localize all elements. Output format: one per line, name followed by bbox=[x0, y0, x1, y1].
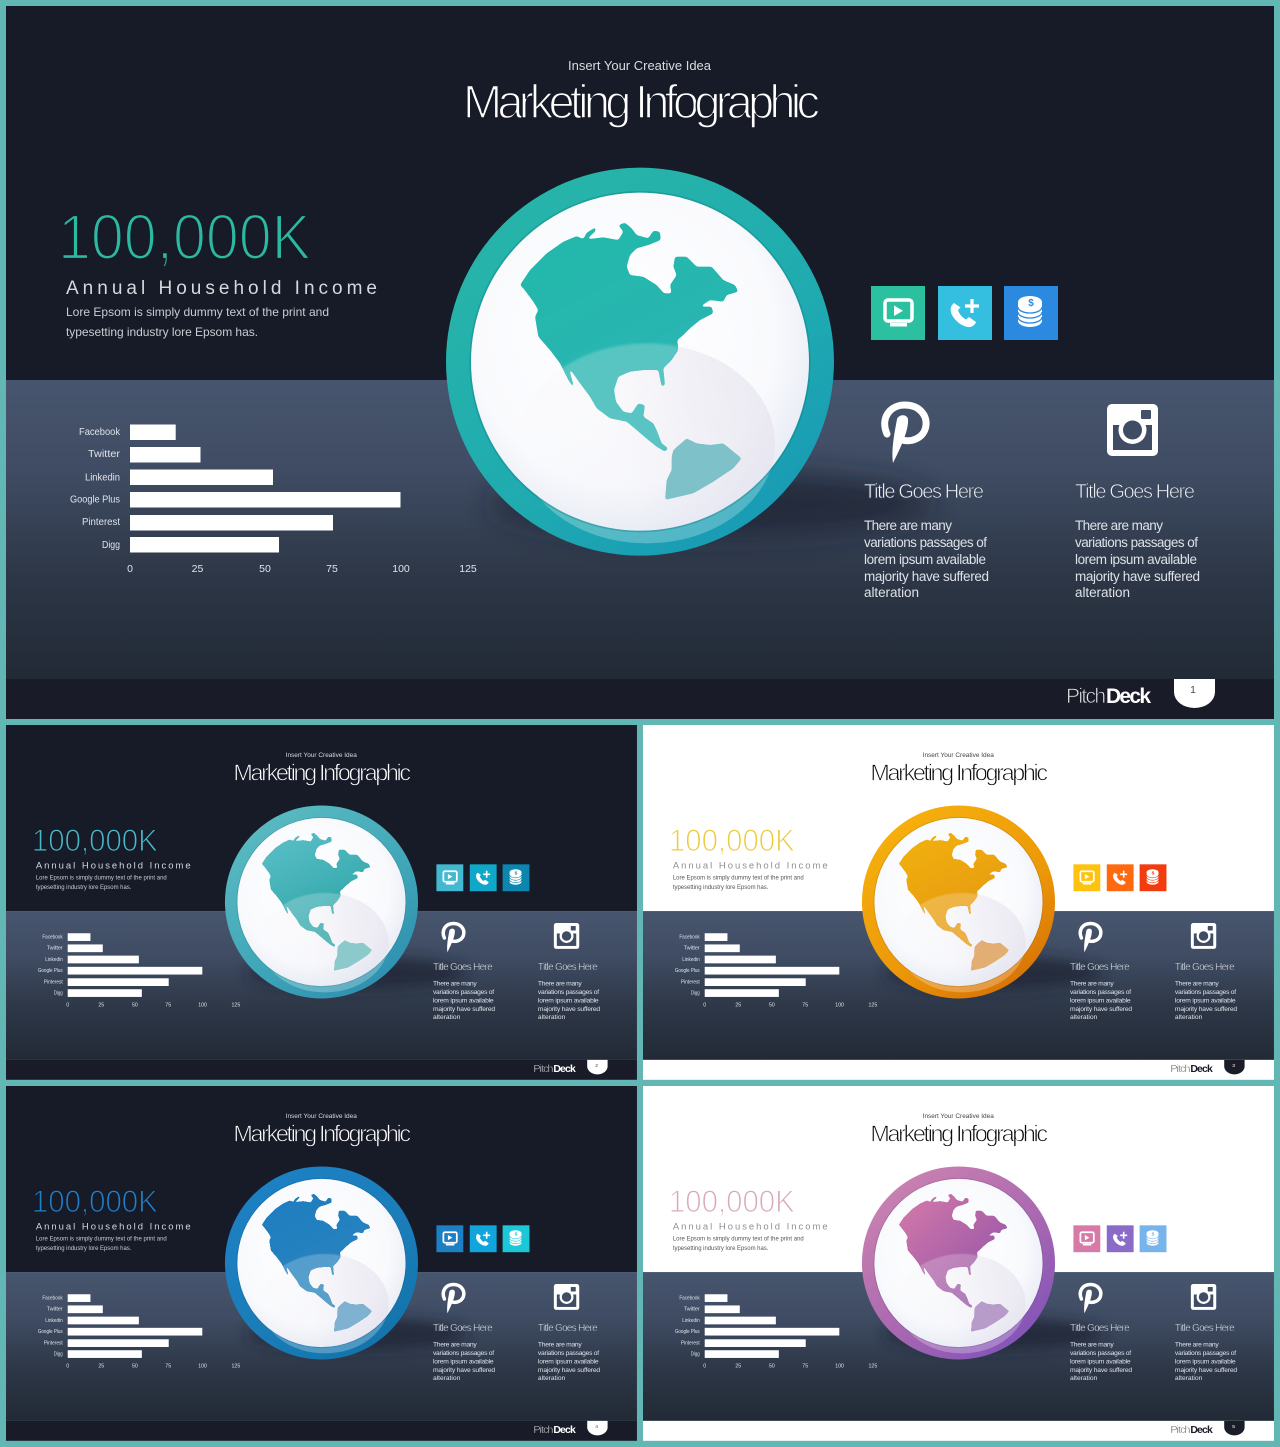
title: Marketing Infographic bbox=[870, 760, 1048, 786]
icon: screen bbox=[1073, 1225, 1100, 1252]
column: pinterest text: Title Goes Here bbox=[864, 481, 984, 503]
bar chart: Facebook bbox=[79, 426, 121, 438]
column: pinterest text: lorem ipsum available bbox=[1070, 998, 1131, 1005]
icon: coins: $ bbox=[1028, 298, 1034, 309]
bar chart: Pinterest bbox=[44, 979, 63, 985]
logo: Pitch bbox=[533, 1064, 554, 1075]
column: pinterest text: variations passages of bbox=[433, 1350, 494, 1357]
title: Marketing Infographic bbox=[233, 760, 411, 786]
column: instagram text: alteration bbox=[538, 1014, 566, 1021]
lower band panel bbox=[6, 380, 1274, 679]
stat heading: Annual Household Income bbox=[673, 860, 828, 871]
stat description: typesetting industry lore Epsom has. bbox=[36, 1246, 132, 1252]
column: pinterest text: majority have suffered bbox=[864, 569, 989, 584]
icon: instagram bbox=[1191, 923, 1216, 949]
slide 5: purple light bbox=[643, 1086, 1274, 1441]
column: pinterest text: majority have suffered bbox=[1070, 1006, 1132, 1013]
column: pinterest text: alteration bbox=[433, 1014, 461, 1021]
bar chart: 125 bbox=[869, 1364, 877, 1370]
bar chart: Google Plus bbox=[675, 1329, 700, 1335]
column: pinterest text: lorem ipsum available bbox=[433, 998, 494, 1005]
column: instagram text bbox=[538, 962, 600, 1021]
globe shadow bbox=[247, 957, 466, 989]
column: instagram text: Title Goes Here bbox=[1075, 481, 1195, 503]
column: pinterest text: alteration bbox=[433, 1375, 461, 1382]
stat number: 100,000K bbox=[32, 1183, 158, 1219]
column: pinterest text: There are many bbox=[433, 981, 477, 988]
bar chart: Digg bbox=[54, 1352, 63, 1358]
bar chart: Facebook bbox=[679, 934, 700, 940]
page badge: 4 bbox=[595, 1424, 598, 1430]
logo: Pitch bbox=[533, 1425, 554, 1436]
column: instagram text: alteration bbox=[1175, 1014, 1203, 1021]
page badge: 1 bbox=[1190, 685, 1196, 696]
bar chart: 0 bbox=[66, 1003, 69, 1009]
icon: screen bbox=[436, 1225, 463, 1252]
column: instagram text: lorem ipsum available bbox=[538, 998, 599, 1005]
bar chart: 75 bbox=[165, 1003, 171, 1009]
logo bbox=[1170, 1064, 1213, 1075]
column: instagram text bbox=[538, 1323, 600, 1382]
stat description: typesetting industry lore Epsom has. bbox=[36, 885, 132, 891]
globe bbox=[862, 1166, 1055, 1360]
stat description: Lore Epsom is simply dummy text of the print and bbox=[673, 1236, 804, 1242]
column: instagram text: alteration bbox=[538, 1375, 566, 1382]
bar chart: 50 bbox=[132, 1364, 138, 1370]
column: pinterest text bbox=[1070, 1323, 1132, 1382]
bar chart: 75 bbox=[326, 563, 338, 575]
north america bbox=[262, 833, 370, 947]
bar chart: Google Plus bbox=[38, 968, 63, 974]
bar chart bbox=[675, 933, 877, 1009]
column: instagram text: variations passages of bbox=[1175, 989, 1236, 996]
column: pinterest text: variations passages of bbox=[433, 989, 494, 996]
column: pinterest text: There are many bbox=[1070, 981, 1114, 988]
column: pinterest text: Title Goes Here bbox=[433, 1323, 493, 1334]
column: instagram text: alteration bbox=[1175, 1375, 1203, 1382]
logo bbox=[533, 1064, 576, 1075]
map bbox=[899, 1194, 1008, 1332]
stat heading: Annual Household Income bbox=[36, 860, 191, 871]
bar chart bbox=[38, 933, 240, 1009]
column: instagram text: Title Goes Here bbox=[538, 962, 598, 973]
stat number: 100,000K bbox=[58, 201, 311, 273]
logo: Deck bbox=[1190, 1064, 1213, 1075]
page badge bbox=[587, 1421, 608, 1435]
bar chart: Twitter bbox=[684, 1306, 700, 1312]
column: pinterest text: There are many bbox=[433, 1342, 477, 1349]
column: instagram text: alteration bbox=[1075, 585, 1130, 600]
column: instagram text: majority have suffered bbox=[1075, 569, 1200, 584]
top panel bbox=[6, 6, 1274, 380]
bar chart: 0 bbox=[703, 1003, 706, 1009]
slide 3: orange light bbox=[643, 725, 1274, 1080]
map bbox=[262, 1194, 372, 1332]
title: Marketing Infographic bbox=[463, 75, 820, 128]
bar chart: Linkedin bbox=[682, 1318, 700, 1324]
icon: screen bbox=[436, 864, 463, 891]
bar chart: 75 bbox=[165, 1364, 171, 1370]
bar chart: Pinterest bbox=[82, 516, 120, 528]
bar chart: 0 bbox=[66, 1364, 69, 1370]
logo bbox=[533, 1425, 576, 1436]
globe bbox=[225, 1166, 418, 1360]
bar chart: 100 bbox=[198, 1364, 207, 1370]
bar chart: 50 bbox=[132, 1003, 138, 1009]
page badge bbox=[1224, 1421, 1245, 1435]
bar chart: Facebook bbox=[679, 1295, 700, 1301]
bar chart: Twitter bbox=[88, 448, 121, 460]
logo: Deck bbox=[1106, 685, 1151, 708]
stat description: Lore Epsom is simply dummy text of the print and bbox=[36, 1236, 167, 1242]
subtitle: Insert Your Creative Idea bbox=[568, 58, 712, 73]
bar chart: Twitter bbox=[47, 1306, 63, 1312]
footer bar bbox=[6, 1060, 637, 1080]
north america bbox=[520, 223, 738, 452]
column: instagram text: There are many bbox=[1175, 981, 1219, 988]
stat description: Lore Epsom is simply dummy text of the print and bbox=[673, 875, 804, 881]
logo: Deck bbox=[553, 1425, 576, 1436]
south america bbox=[334, 1301, 372, 1332]
icon: instagram bbox=[554, 923, 579, 949]
bar chart bbox=[675, 1294, 877, 1370]
icon: pinterest bbox=[885, 405, 926, 463]
stat number: 100,000K bbox=[669, 822, 795, 858]
bar chart: Twitter bbox=[47, 945, 63, 951]
column: pinterest text: majority have suffered bbox=[433, 1367, 495, 1374]
globe shadow bbox=[247, 1318, 466, 1350]
stat description bbox=[673, 875, 804, 891]
column: instagram text: majority have suffered bbox=[538, 1006, 600, 1013]
north america bbox=[899, 833, 1007, 947]
column: instagram text: There are many bbox=[538, 1342, 582, 1349]
stat description: typesetting industry lore Epsom has. bbox=[673, 885, 769, 891]
bar chart: Google Plus bbox=[675, 968, 700, 974]
stat heading: Annual Household Income bbox=[673, 1221, 828, 1232]
column: pinterest text: Title Goes Here bbox=[433, 962, 493, 973]
bar chart: Linkedin bbox=[45, 957, 63, 963]
slide 1: main teal dark bbox=[6, 6, 1274, 719]
top panel bbox=[6, 1086, 637, 1272]
bar chart: Google Plus bbox=[70, 494, 120, 506]
bar chart: Linkedin bbox=[682, 957, 700, 963]
north america bbox=[899, 1194, 1007, 1308]
south america bbox=[971, 1301, 1009, 1332]
bar chart: 100 bbox=[198, 1003, 207, 1009]
bar chart: Google Plus bbox=[38, 1329, 63, 1335]
south america bbox=[971, 940, 1009, 971]
lower band panel bbox=[6, 911, 637, 1060]
icon: pinterest bbox=[1080, 924, 1101, 952]
title: Marketing Infographic bbox=[233, 1121, 411, 1147]
icon: pinterest bbox=[1080, 1285, 1101, 1313]
logo: Deck bbox=[553, 1064, 576, 1075]
column: pinterest text: lorem ipsum available bbox=[433, 1359, 494, 1366]
icon: phone bbox=[938, 286, 992, 340]
bar chart: Digg bbox=[54, 991, 63, 997]
page badge bbox=[1174, 679, 1215, 708]
bar chart: 25 bbox=[98, 1364, 104, 1370]
south america bbox=[665, 438, 742, 500]
bar chart: 25 bbox=[735, 1364, 741, 1370]
bar chart: 75 bbox=[802, 1364, 808, 1370]
column: instagram text bbox=[1075, 481, 1200, 600]
bar chart: 25 bbox=[192, 563, 203, 575]
globe bbox=[225, 805, 418, 999]
icon: coins bbox=[1140, 864, 1166, 891]
bar chart bbox=[38, 1294, 240, 1370]
logo: Deck bbox=[1190, 1425, 1213, 1436]
title: Marketing Infographic bbox=[870, 1121, 1048, 1147]
logo bbox=[1170, 1425, 1213, 1436]
page badge bbox=[1224, 1060, 1245, 1074]
bar chart: 100 bbox=[835, 1003, 844, 1009]
column: pinterest text: Title Goes Here bbox=[1070, 962, 1130, 973]
footer bar bbox=[6, 679, 1274, 719]
column: pinterest text: alteration bbox=[864, 585, 919, 600]
column: instagram text: majority have suffered bbox=[1175, 1367, 1237, 1374]
column: pinterest text: lorem ipsum available bbox=[1070, 1359, 1131, 1366]
icon: pinterest bbox=[443, 1285, 464, 1313]
column: pinterest text: There are many bbox=[1070, 1342, 1114, 1349]
stat description: Lore Epsom is simply dummy text of the print and bbox=[36, 875, 167, 881]
logo: Pitch bbox=[1066, 685, 1106, 708]
icon: screen bbox=[871, 286, 925, 340]
bar chart: Pinterest bbox=[44, 1340, 63, 1346]
footer bar bbox=[6, 1421, 637, 1441]
column: instagram text: There are many bbox=[538, 981, 582, 988]
icon: phone bbox=[470, 1225, 497, 1252]
top panel bbox=[643, 1086, 1274, 1272]
lower band panel bbox=[643, 911, 1274, 1060]
bar chart: Pinterest bbox=[681, 1340, 700, 1346]
column: instagram text: variations passages of bbox=[1075, 535, 1198, 550]
slide 2: teal dark bbox=[6, 725, 637, 1080]
bar chart: 0 bbox=[127, 563, 133, 575]
stat description: typesetting industry lore Epsom has. bbox=[673, 1246, 769, 1252]
column: instagram text: lorem ipsum available bbox=[1075, 552, 1197, 567]
column: instagram text: lorem ipsum available bbox=[1175, 998, 1236, 1005]
column: instagram text: variations passages of bbox=[538, 1350, 599, 1357]
subtitle: Insert Your Creative Idea bbox=[286, 1113, 357, 1120]
column: pinterest text: variations passages of bbox=[1070, 1350, 1131, 1357]
south america bbox=[334, 940, 372, 971]
bar chart: Pinterest bbox=[681, 979, 700, 985]
column: pinterest text bbox=[433, 962, 495, 1021]
globe shadow bbox=[491, 472, 931, 536]
globe bbox=[446, 168, 834, 556]
footer bar bbox=[643, 1421, 1274, 1441]
column: pinterest text: variations passages of bbox=[864, 535, 987, 550]
column: instagram text: lorem ipsum available bbox=[1175, 1359, 1236, 1366]
icon: phone bbox=[470, 864, 497, 891]
stat description bbox=[66, 305, 329, 339]
icon: coins: $ bbox=[1152, 1231, 1155, 1237]
bar chart: 50 bbox=[259, 563, 271, 575]
map bbox=[899, 833, 1008, 970]
stat description bbox=[36, 1236, 167, 1252]
bar chart: Linkedin bbox=[45, 1318, 63, 1324]
slide 4: blue dark bbox=[6, 1086, 637, 1441]
column: instagram text bbox=[1175, 1323, 1237, 1382]
column: instagram text: There are many bbox=[1075, 518, 1163, 533]
logo: Pitch bbox=[1170, 1064, 1191, 1075]
column: pinterest text bbox=[433, 1323, 495, 1382]
bar chart: Twitter bbox=[684, 945, 700, 951]
icon: phone bbox=[1107, 1225, 1134, 1252]
page badge: 3 bbox=[1232, 1063, 1235, 1069]
page badge: 5 bbox=[1232, 1424, 1235, 1430]
column: pinterest text bbox=[1070, 962, 1132, 1021]
icon: phone bbox=[1107, 864, 1134, 891]
icon: instagram bbox=[1107, 404, 1158, 456]
column: instagram text: majority have suffered bbox=[538, 1367, 600, 1374]
bar chart: Linkedin bbox=[85, 472, 120, 484]
column: instagram text bbox=[1175, 962, 1237, 1021]
icon: coins bbox=[1004, 286, 1058, 340]
icon: instagram bbox=[1191, 1284, 1216, 1310]
subtitle: Insert Your Creative Idea bbox=[923, 752, 994, 759]
stat description: Lore Epsom is simply dummy text of the print and bbox=[66, 305, 329, 319]
icon: coins bbox=[503, 1225, 529, 1252]
logo: Pitch bbox=[1170, 1425, 1191, 1436]
icon: coins: $ bbox=[515, 870, 518, 876]
globe shadow bbox=[884, 957, 1103, 989]
column: instagram text: lorem ipsum available bbox=[538, 1359, 599, 1366]
bar chart: 25 bbox=[98, 1003, 104, 1009]
top panel bbox=[643, 725, 1274, 911]
map bbox=[262, 833, 372, 970]
icon: coins: $ bbox=[515, 1231, 518, 1237]
globe bbox=[862, 805, 1055, 999]
column: instagram text: There are many bbox=[1175, 1342, 1219, 1349]
page badge: 2 bbox=[595, 1063, 598, 1069]
stat number: 100,000K bbox=[669, 1183, 795, 1219]
footer bar bbox=[643, 1060, 1274, 1080]
logo bbox=[1066, 685, 1151, 708]
bar chart: Digg bbox=[102, 539, 120, 551]
column: instagram text: Title Goes Here bbox=[538, 1323, 598, 1334]
bar chart: Facebook bbox=[42, 1295, 63, 1301]
icon: coins: $ bbox=[1152, 870, 1155, 876]
bar chart: 25 bbox=[735, 1003, 741, 1009]
column: pinterest text: majority have suffered bbox=[1070, 1367, 1132, 1374]
icon: pinterest bbox=[443, 924, 464, 952]
bar chart: Digg bbox=[691, 1352, 700, 1358]
column: instagram text: Title Goes Here bbox=[1175, 962, 1235, 973]
column: pinterest text: alteration bbox=[1070, 1375, 1098, 1382]
column: pinterest text: majority have suffered bbox=[433, 1006, 495, 1013]
column: instagram text: variations passages of bbox=[538, 989, 599, 996]
column: pinterest text bbox=[864, 481, 989, 600]
column: instagram text: variations passages of bbox=[1175, 1350, 1236, 1357]
bar chart: 125 bbox=[459, 563, 477, 575]
column: pinterest text: There are many bbox=[864, 518, 952, 533]
bar chart: Facebook bbox=[42, 934, 63, 940]
column: pinterest text: alteration bbox=[1070, 1014, 1098, 1021]
north america bbox=[262, 1194, 370, 1308]
map bbox=[520, 223, 741, 500]
bar chart: 75 bbox=[802, 1003, 808, 1009]
bar chart: 50 bbox=[769, 1003, 775, 1009]
bar chart bbox=[70, 424, 477, 575]
stat number: 100,000K bbox=[32, 822, 158, 858]
bar chart: 0 bbox=[703, 1364, 706, 1370]
column: pinterest text: lorem ipsum available bbox=[864, 552, 986, 567]
bar chart: 50 bbox=[769, 1364, 775, 1370]
lower band panel bbox=[643, 1272, 1274, 1421]
stat description: typesetting industry lore Epsom has. bbox=[66, 325, 258, 339]
subtitle: Insert Your Creative Idea bbox=[286, 752, 357, 759]
page badge bbox=[587, 1060, 608, 1074]
column: instagram text: majority have suffered bbox=[1175, 1006, 1237, 1013]
stat heading: Annual Household Income bbox=[36, 1221, 191, 1232]
subtitle: Insert Your Creative Idea bbox=[923, 1113, 994, 1120]
stat heading: Annual Household Income bbox=[66, 278, 377, 299]
lower band panel bbox=[6, 1272, 637, 1421]
bar chart: 125 bbox=[232, 1364, 240, 1370]
bar chart: 125 bbox=[232, 1003, 240, 1009]
bar chart: 125 bbox=[869, 1003, 877, 1009]
bar chart: 100 bbox=[392, 563, 410, 575]
icon: screen bbox=[1073, 864, 1100, 891]
globe shadow bbox=[884, 1318, 1103, 1350]
column: pinterest text: Title Goes Here bbox=[1070, 1323, 1130, 1334]
icon: coins bbox=[1140, 1225, 1166, 1252]
bar chart: 100 bbox=[835, 1364, 844, 1370]
stat description bbox=[673, 1236, 804, 1252]
bar chart: Digg bbox=[691, 991, 700, 997]
column: pinterest text: variations passages of bbox=[1070, 989, 1131, 996]
top panel bbox=[6, 725, 637, 911]
icon: coins bbox=[503, 864, 529, 891]
column: instagram text: Title Goes Here bbox=[1175, 1323, 1235, 1334]
stat description bbox=[36, 875, 167, 891]
icon: instagram bbox=[554, 1284, 579, 1310]
